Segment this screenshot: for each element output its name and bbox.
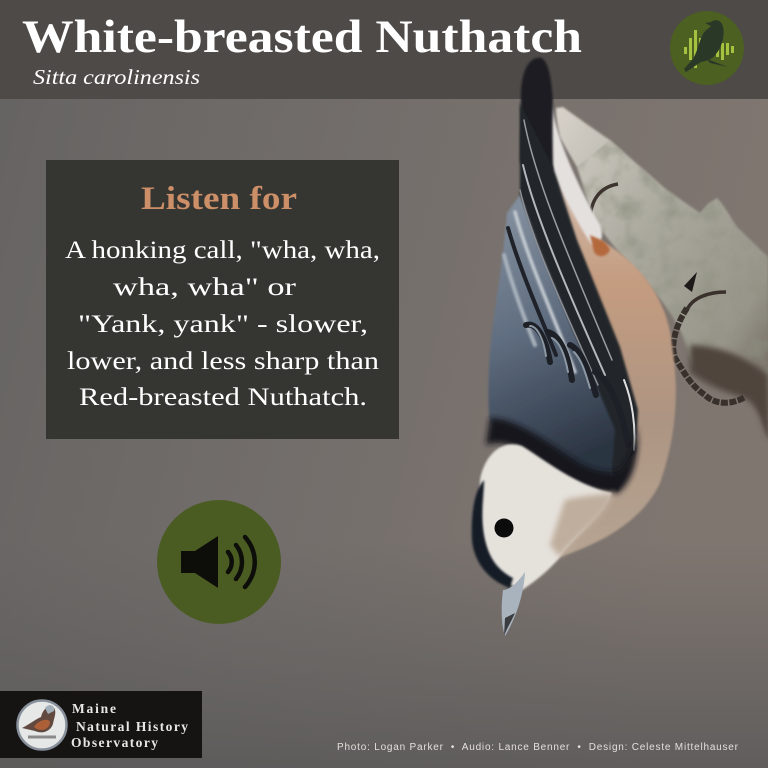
scientific name: Sitta carolinensis: [33, 65, 200, 89]
neck buff shading: [550, 493, 614, 557]
panel: listen for: [46, 160, 399, 439]
logo text: Maine: [72, 701, 116, 716]
panel body text: [65, 237, 380, 411]
icon: bird with sound waves: [670, 11, 744, 85]
panel body text: lower, and less sharp than: [67, 348, 380, 375]
panel body text: "Yank, yank" - slower,: [78, 311, 368, 338]
icon: audio speaker button: [157, 500, 281, 624]
header band: [0, 0, 768, 99]
panel heading: Listen for: [141, 181, 297, 217]
wing feather stripes: [504, 120, 635, 450]
panel body text: A honking call, "wha, wha,: [65, 237, 380, 264]
belly: [522, 150, 676, 590]
head and neck: [480, 444, 612, 590]
logo text: Observatory: [71, 735, 158, 750]
branch: [556, 107, 768, 440]
dark nape band: [486, 418, 638, 493]
wing coverts: [488, 195, 615, 490]
bill: [502, 572, 525, 636]
logo text: Natural History: [76, 719, 188, 734]
title: White-breasted Nuthatch: [22, 11, 582, 63]
logo text: [71, 701, 188, 750]
undertail white: [540, 100, 602, 245]
photo and design credits: Photo: Logan Parker • Audio: Lance Benner • Design: Celeste Mittelhauser: [337, 742, 739, 753]
black crown: [472, 480, 513, 588]
tail: [520, 58, 553, 190]
panel body text: Red-breasted Nuthatch.: [79, 384, 367, 411]
photo: nuthatch on branch: [472, 58, 768, 636]
rust patch: [590, 235, 610, 256]
logo: duck badge: [18, 700, 66, 750]
panel body text: wha, wha" or: [113, 274, 297, 301]
primaries dark block: [520, 103, 638, 492]
eye: [494, 518, 514, 538]
logo panel: [0, 691, 202, 758]
